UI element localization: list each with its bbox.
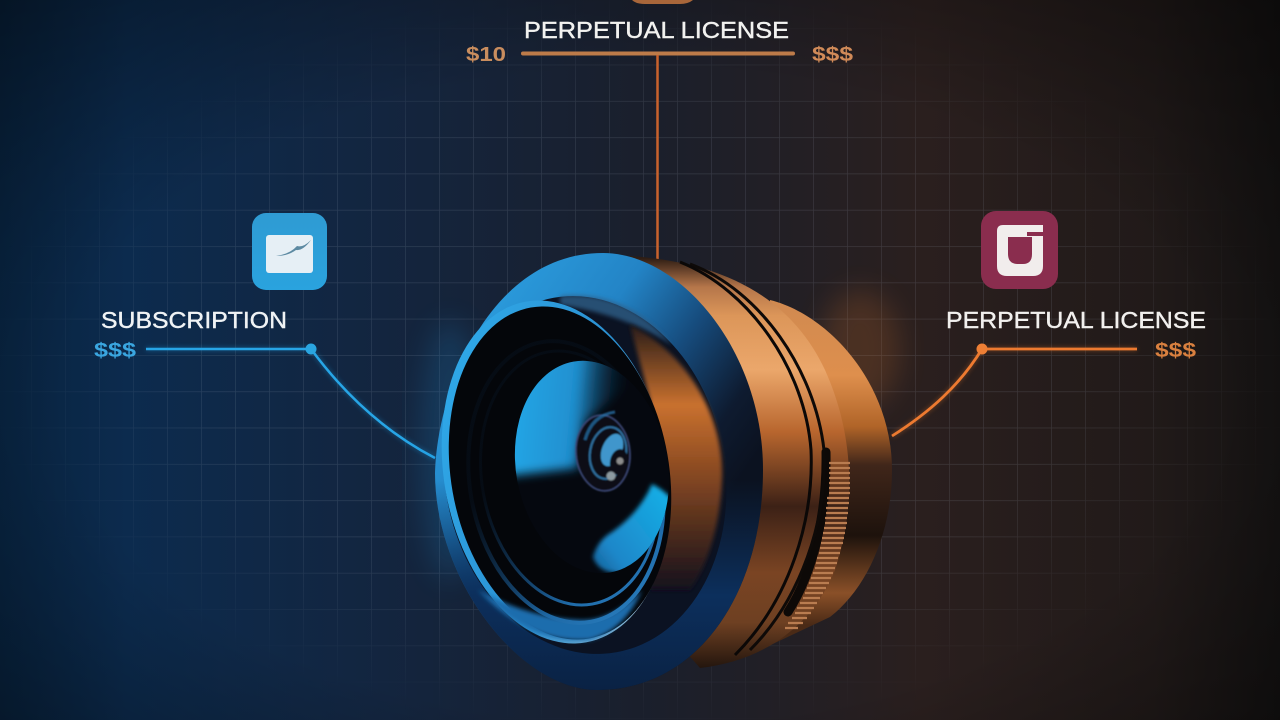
lens hood [435,253,763,690]
glass highlight lower [590,482,668,573]
price high: $$$ [812,44,853,66]
connector to lens [656,55,659,262]
rear barrel [630,256,849,668]
lens glow [420,290,900,580]
lens illustration [416,253,900,690]
rear lens ring [760,300,892,650]
focus ring groove [690,264,824,650]
heading: top perpetual license: PERPETUAL LICENSE [524,17,789,43]
hood inner shadow [416,273,754,677]
front copper groove [680,262,811,655]
price: perpetual license right: $$$ [1155,340,1196,362]
front blue rim [416,282,696,662]
heading: subscription: SUBSCRIPTION [101,307,287,333]
price scale line [521,52,795,56]
panel: subscription [94,213,435,458]
knurled focus ring [785,463,850,628]
dark recess behind knurl [788,452,826,612]
bottom blue crescent [478,590,642,640]
icon: subscription [252,213,327,290]
panel: perpetual license right [892,211,1206,436]
heading: perpetual license right: PERPETUAL LICENSE [946,307,1206,333]
connector: perpetual license right [892,344,1137,436]
price low: $10 [466,44,506,66]
orange reflection [630,325,722,590]
price: subscription: $$$ [94,340,136,362]
top cropped icon [632,0,693,4]
connector: subscription [146,344,435,458]
icon: perpetual license [981,211,1058,289]
inner optic rings [573,412,633,493]
inner barrel rings [423,289,697,657]
lens glass [514,360,668,573]
panel: top perpetual license [466,17,853,262]
glass highlight upper [514,360,623,483]
top inner reflection [560,295,672,345]
